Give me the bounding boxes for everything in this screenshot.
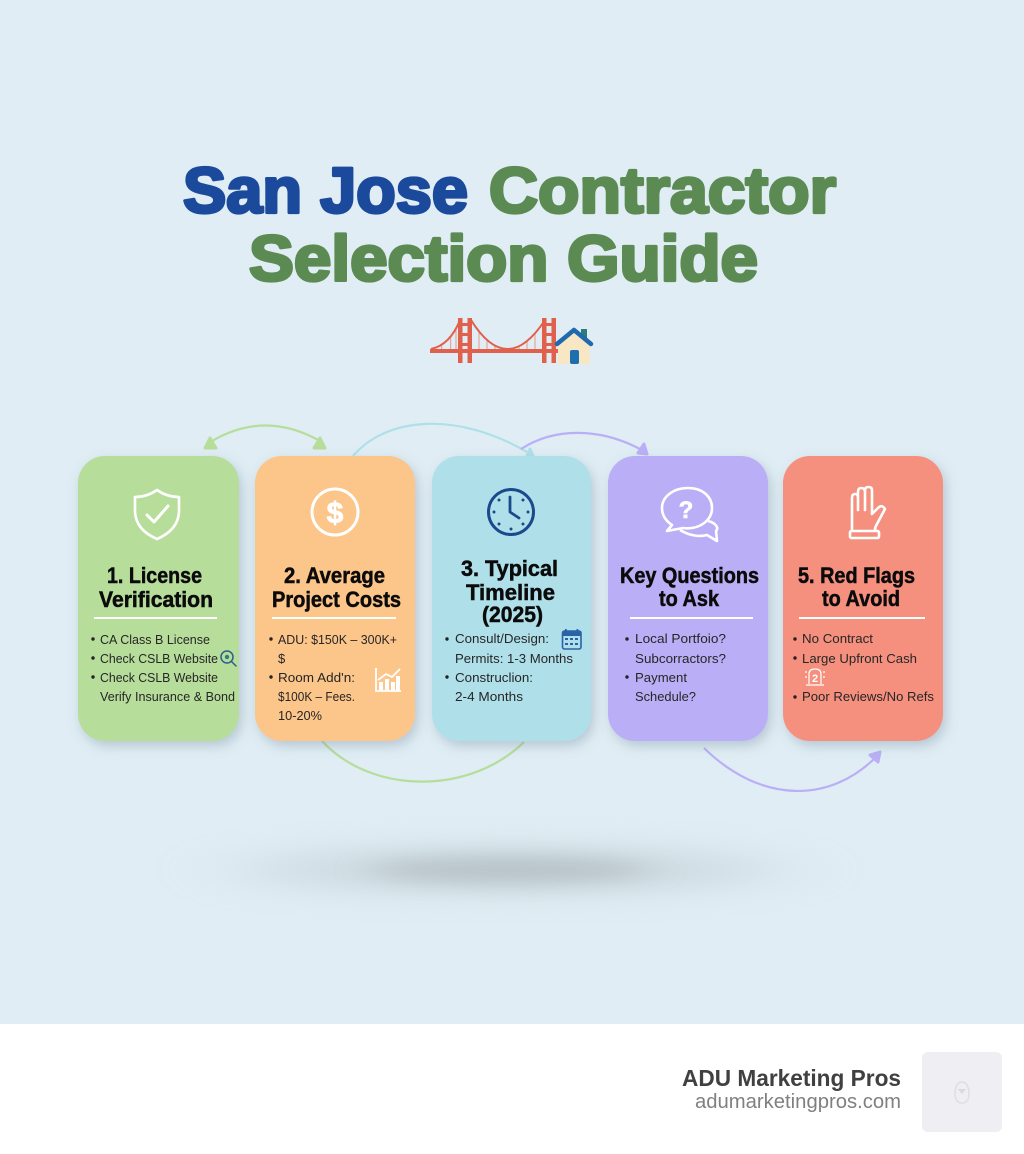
footer band xyxy=(0,1024,1024,1154)
heading xyxy=(99,563,213,612)
heading xyxy=(461,556,558,627)
bullet list: Payment xyxy=(635,670,687,685)
heading: Timeline xyxy=(466,580,555,605)
bullet list: Consult/Design: xyxy=(455,631,549,646)
bullet list: ADU: $150K – 300K+ xyxy=(278,632,397,647)
title xyxy=(183,154,836,294)
heading: (2025) xyxy=(482,602,543,627)
heading: Project Costs xyxy=(272,587,401,612)
bullet list: Large Upfront Cash xyxy=(802,651,917,666)
heading: to Ask xyxy=(659,586,720,611)
panel: license verification xyxy=(78,456,239,741)
bullet list xyxy=(91,632,235,704)
arrow: green bottom xyxy=(322,741,524,782)
heading: Verification xyxy=(99,587,213,612)
bullet list: No Contract xyxy=(802,631,873,646)
panel: typical timeline xyxy=(432,456,591,741)
heading: 2. Average xyxy=(284,563,385,588)
bullet list xyxy=(445,631,573,704)
arrow: purple top xyxy=(521,433,647,454)
footer brand text: adumarketingpros.com xyxy=(695,1091,901,1113)
bullet list xyxy=(269,632,397,723)
bullet list: 10-20% xyxy=(278,708,322,723)
heading: to Avoid xyxy=(822,586,900,611)
heading: Key Questions xyxy=(620,563,759,588)
bullet list: $100K – Fees. xyxy=(278,689,355,704)
panel: average project costs xyxy=(255,456,415,741)
heading xyxy=(272,563,401,612)
footer logo tile xyxy=(922,1052,1002,1132)
bullet list: Check CSLB Website xyxy=(100,651,218,666)
heading: 5. Red Flags xyxy=(798,563,915,588)
bullet list: Check CSLB Website xyxy=(100,670,218,685)
bullet list: Schedule? xyxy=(635,689,696,704)
arrow: purple bottom xyxy=(704,748,880,791)
icon: dollar coin: $ xyxy=(327,497,344,530)
icon: dollar coin xyxy=(312,489,358,535)
heading: 3. Typical xyxy=(461,556,558,581)
panel: red flags xyxy=(783,456,943,741)
title: San Jose xyxy=(183,154,468,226)
arrow: green top double-headed xyxy=(205,426,325,448)
bullet list: Poor Reviews/No Refs xyxy=(802,689,934,704)
bullet list: Subcorractors? xyxy=(635,651,726,666)
icon: magnifier xyxy=(221,651,236,666)
bullet list: Verify Insurance & Bond xyxy=(100,689,235,704)
icon: chat bubbles xyxy=(662,488,717,541)
bullet list xyxy=(625,631,726,704)
footer brand text: ADU Marketing Pros xyxy=(682,1065,901,1091)
icon: alert siren xyxy=(805,669,825,685)
heading xyxy=(620,563,759,611)
bullet list: Permits: 1-3 Months xyxy=(455,651,573,666)
icon: alert siren: 2 xyxy=(812,673,818,685)
footer brand text xyxy=(682,1065,901,1113)
arrow: cyan xyxy=(353,424,533,456)
heading xyxy=(798,563,915,611)
title: Contractor xyxy=(489,154,836,226)
icon: clock xyxy=(488,490,534,534)
title: Selection Guide xyxy=(249,222,758,294)
bullet list: 2-4 Months xyxy=(455,689,524,704)
icon: raised hand xyxy=(850,487,885,538)
bullet list xyxy=(793,631,934,704)
ground shadow xyxy=(240,848,780,892)
icon: calendar xyxy=(562,629,581,649)
icon: chat bubbles: ? xyxy=(679,497,693,524)
bullet list: Construclion: xyxy=(455,670,533,685)
panel: key questions xyxy=(608,456,768,741)
icon: shield check xyxy=(135,490,179,539)
bullet list: Local Portfoio? xyxy=(635,631,726,646)
bullet list: Room Add'n: xyxy=(278,670,355,685)
icon: bar chart xyxy=(376,668,401,691)
bullet list: $ xyxy=(278,651,286,666)
icon: golden gate bridge and house xyxy=(430,318,591,364)
bullet list: CA Class B License xyxy=(100,632,210,647)
heading: 1. License xyxy=(107,563,202,588)
